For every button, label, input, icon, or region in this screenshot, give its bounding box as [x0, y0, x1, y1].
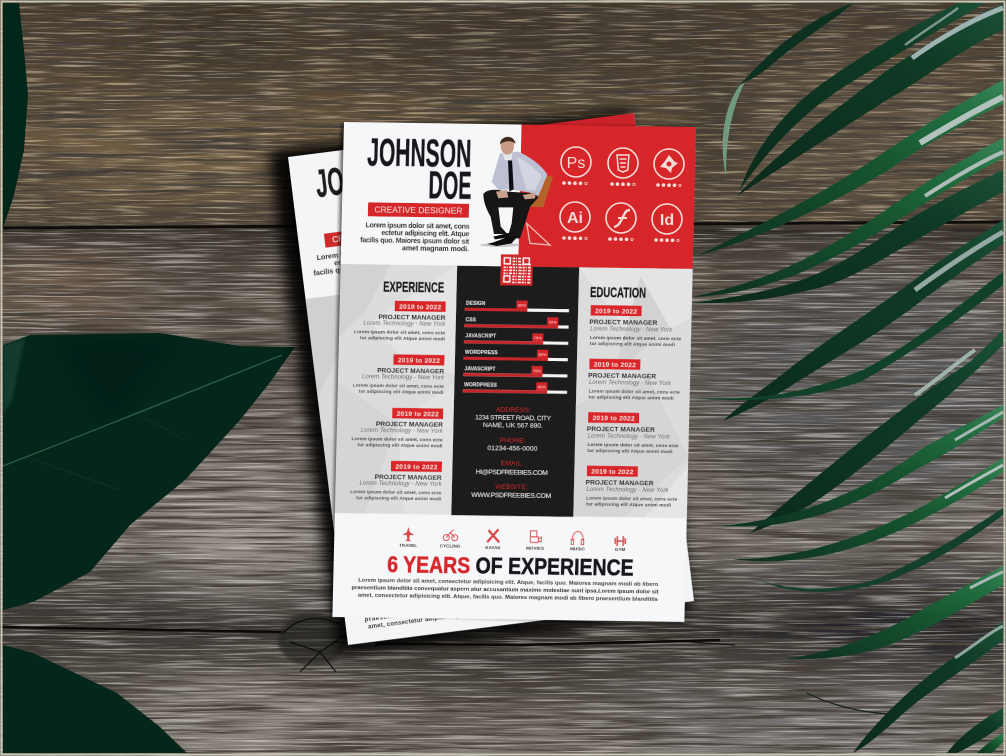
education entry 2 — [588, 359, 681, 402]
frond 10 — [720, 405, 1003, 527]
experience entry 4 — [350, 460, 443, 503]
hobby: movies: MOVIES — [526, 546, 544, 551]
frond 4 — [697, 80, 1003, 256]
experience entry 3: PROJECT MANAGER — [376, 421, 443, 429]
hobby: kayak — [485, 529, 502, 550]
education entry 3: PROJECT MANAGER — [587, 426, 655, 434]
hobby: music — [570, 531, 586, 552]
frond 13 — [785, 566, 1003, 659]
education entry 4: tur adipiscing elit Atque animi modi — [586, 502, 671, 509]
contact details: EMAIL: — [501, 460, 523, 468]
education entry 2: tur adipiscing elit Atque animi modi — [589, 395, 674, 402]
intro text: facilis quo. Maiores ipsum dolor sit — [360, 237, 470, 246]
back flyer sheet: amet, consectetur adipisicing elit. Atque, facilis quo. Maiores magnam modi ab libero praesentium — [368, 587, 669, 631]
education entry 2: 2019 to 2022 — [594, 362, 636, 369]
frond 11 — [733, 458, 1003, 561]
section heading: education: EDUCATION — [590, 284, 646, 302]
black centre panel — [451, 266, 579, 517]
education entry 2: Lorem ipsum dolor sit amet, cons ecte — [589, 389, 680, 396]
frond 2 — [740, 3, 985, 190]
skill: wordpress 2: WORDPRESS — [464, 382, 498, 389]
hobby: movies — [526, 531, 544, 551]
experience entry 1: 2019 to 2022 — [399, 304, 442, 311]
frond 3 — [737, 4, 1003, 196]
education entry 2: Lorem Technology - New York — [589, 380, 672, 387]
back flyer sheet: facilis quo. Maiores ipsum dolor sit — [313, 256, 432, 278]
contact details: NAME, UK 567 890. — [483, 422, 543, 430]
education entry 1 — [589, 305, 682, 348]
education entry 4: Lorem Technology - New York — [586, 487, 670, 494]
experience entry 4: 2019 to 2022 — [395, 464, 438, 471]
role badge: CREATIVE DESIGNER — [374, 204, 463, 216]
hobby: music: MUSIC — [570, 546, 586, 552]
education entry 1: 2019 to 2022 — [595, 308, 638, 316]
experience entry 1: Lorem Technology - New York — [363, 321, 446, 328]
skill: css — [465, 316, 569, 329]
frond 14 — [853, 622, 1003, 753]
red header panel — [518, 125, 696, 270]
skill: css: 90% — [549, 319, 557, 324]
leaf: bottom left — [3, 645, 187, 753]
frond 5 — [692, 138, 1003, 297]
big headline: OF EXPERIENCE — [475, 553, 634, 581]
experience entry 4: PROJECT MANAGER — [375, 474, 442, 482]
back flyer sheet: ectetur adipiscing elit. Atque — [334, 248, 430, 267]
footer paragraph: praesentium blanditiis consequatur aspern atur accusantium maxime molestiae sunt ipsa.Lorem ipsum dolor sit — [351, 585, 659, 596]
experience entry 2: Lorem Technology - New York — [362, 374, 445, 382]
skill: javascript 2: JAVASCRIPT — [464, 366, 496, 372]
education entry 3: Lorem Technology - New York — [588, 434, 671, 441]
experience entry 1 — [354, 300, 447, 343]
skill: javascript — [464, 332, 568, 345]
contact details: 1234 STREET ROAD, CITY — [475, 414, 552, 423]
hobby: gym: GYM — [615, 547, 626, 552]
icon: Illustrator: Ai — [567, 210, 583, 227]
section heading: experience: EXPERIENCE — [383, 279, 444, 296]
skill: css: CSS — [466, 317, 477, 323]
experience entry 4: tur adipiscing elit Atque animi modi — [356, 495, 441, 503]
education entry 1: PROJECT MANAGER — [589, 319, 658, 327]
frond 17 — [807, 693, 887, 714]
education entry 1: Lorem ipsum dolor sit amet, cons ecte — [590, 335, 681, 342]
skill: design: DESIGN — [466, 301, 486, 307]
experience entry 1: PROJECT MANAGER — [378, 314, 446, 322]
education entry 1: tur adipiscing elit Atque animi modi — [590, 341, 675, 348]
contact details: PHONE: — [499, 437, 526, 445]
intro text: Lorem ipsum dolor sit amet, cons — [365, 222, 470, 231]
experience entry 2 — [353, 354, 446, 396]
education entry 4: 2019 to 2022 — [591, 469, 634, 476]
experience entry 2: 2019 to 2022 — [398, 357, 440, 365]
skill: javascript: JAVASCRIPT — [465, 333, 496, 340]
skill: design: 60% — [518, 303, 526, 308]
education entry 1: Lorem Technology - New York — [590, 327, 673, 334]
back flyer sheet: praesentium blanditiis consequatur aspern atur accusantium maxime molestiae sunt ipsa. — [364, 579, 670, 624]
frond 12 — [757, 508, 1003, 592]
education entry 3: tur adipiscing elit Atque animi modi — [587, 448, 672, 455]
education entry 4: Lorem ipsum dolor sit amet, cons ecte — [586, 496, 678, 503]
contact details: HI@PSDFREEBIES.COM — [476, 469, 548, 477]
knot in the wood — [278, 614, 346, 672]
frond 16 — [977, 733, 1003, 753]
contact details: WEBSITE: — [495, 484, 528, 491]
frond 6 — [692, 170, 1003, 303]
icon: HTML5 — [608, 148, 638, 186]
big headline — [387, 551, 634, 581]
hobby: cycling — [440, 530, 461, 549]
education entry 3: 2019 to 2022 — [593, 415, 635, 423]
experience entry 3 — [351, 407, 444, 450]
grey middle band — [335, 264, 693, 518]
experience entry 2: tur adipiscing elit Atque animi modi — [359, 389, 444, 396]
experience entry 3: Lorem Technology - New York — [361, 428, 444, 435]
shadow of front flyer on back flyer — [331, 124, 693, 624]
icon: aperture — [654, 149, 684, 187]
experience entry 3: Lorem ipsum dolor sit amet, cons ecte — [351, 436, 443, 444]
skill: javascript: 75% — [534, 335, 542, 340]
back flyer sheet — [288, 113, 694, 645]
software skill icons — [560, 147, 684, 242]
skill bars chart — [463, 300, 569, 394]
skill: design — [465, 300, 569, 312]
hobby: kayak: KAYAK — [485, 545, 502, 550]
icon: Flash — [606, 203, 636, 241]
back flyer sheet: CREATIVE DESIGNER — [332, 224, 418, 245]
hobby: cycling: CYCLING — [440, 544, 461, 549]
name heading — [366, 131, 473, 208]
frond 9 — [750, 330, 1003, 533]
back flyer sheet: JOHNSON — [313, 149, 422, 206]
experience entry 3: tur adipiscing elit Atque animi modi — [357, 442, 442, 450]
frond 7 — [723, 220, 1003, 421]
name heading: DOE — [428, 164, 472, 208]
back flyer sheet: Lorem ipsum dolor sit amet, cons — [316, 241, 429, 262]
hobby icons row — [399, 527, 626, 552]
intro text — [360, 222, 470, 253]
icon: Photoshop: Ps — [567, 155, 585, 172]
footer paragraph: Lorem ipsum dolor sit amet, consectetur adipisicing elit. Atque, facilis quo. Maiores magnam modi ab libero — [358, 578, 659, 588]
hobby: travel — [399, 527, 418, 548]
hobby: gym — [615, 536, 626, 552]
frond 15 — [947, 708, 1003, 753]
front flyer — [332, 122, 696, 622]
photo: man sitting on chair — [480, 137, 553, 247]
big headline: 6 YEARS — [387, 551, 471, 579]
skill: javascript 2: 75% — [533, 368, 542, 373]
contact details: WWW.PSDFREEBIES.COM — [471, 492, 552, 500]
contact details: 01234-456-0000 — [487, 445, 538, 453]
skill: wordpress: WORDPRESS — [465, 350, 498, 356]
experience entry 1: tur adipiscing elit Atque animi modi — [360, 335, 445, 343]
leaf: top left — [3, 3, 28, 228]
frond 8 — [693, 272, 1003, 400]
intro text: ectetur adipiscing elit. Atque — [381, 230, 470, 238]
shadow under flyers — [268, 110, 692, 655]
education entry 4: PROJECT MANAGER — [586, 480, 654, 488]
QR code — [500, 254, 533, 286]
contact details: ADDRESS: — [496, 407, 531, 414]
leaf: large middle left — [3, 333, 295, 610]
role badge — [368, 202, 469, 218]
education entry 4 — [585, 466, 678, 509]
intro text: amet magnam modi. — [402, 245, 469, 253]
skill: javascript 2 — [463, 365, 568, 377]
experience entry 4: Lorem Technology - New York — [359, 481, 443, 488]
skill: wordpress 2 — [463, 381, 567, 394]
contact details — [471, 406, 554, 500]
icon: InDesign: Id — [660, 212, 674, 229]
education entry 3 — [586, 412, 680, 455]
skill: wordpress: 80% — [539, 352, 547, 357]
experience entry 3: 2019 to 2022 — [397, 411, 439, 418]
experience entry 2: PROJECT MANAGER — [377, 368, 444, 376]
skill: wordpress — [464, 349, 568, 361]
palm fronds right — [692, 3, 1003, 753]
education entry 3: Lorem ipsum dolor sit amet, cons ecte — [587, 442, 679, 449]
hobby: travel: TRAVEL — [399, 543, 417, 548]
footer paragraph — [351, 578, 659, 603]
footer paragraph: amet, consectetur adipisicing elit. Atque, facilis quo. Maiores magnam modi ab libero praesentium blanditiis — [358, 593, 658, 603]
skill: wordpress 2: 80% — [538, 384, 546, 389]
flyer paper — [332, 122, 696, 622]
education entry 2: PROJECT MANAGER — [588, 373, 656, 381]
experience entry 2: Lorem ipsum dolor sit amet, cons ecte — [353, 383, 444, 390]
frond 1 — [723, 3, 853, 176]
name heading: JOHNSON — [367, 131, 472, 176]
experience entry 4: Lorem ipsum dolor sit amet, cons ecte — [350, 489, 442, 497]
experience entry 1: Lorem ipsum dolor sit amet, cons ecte — [354, 329, 445, 337]
